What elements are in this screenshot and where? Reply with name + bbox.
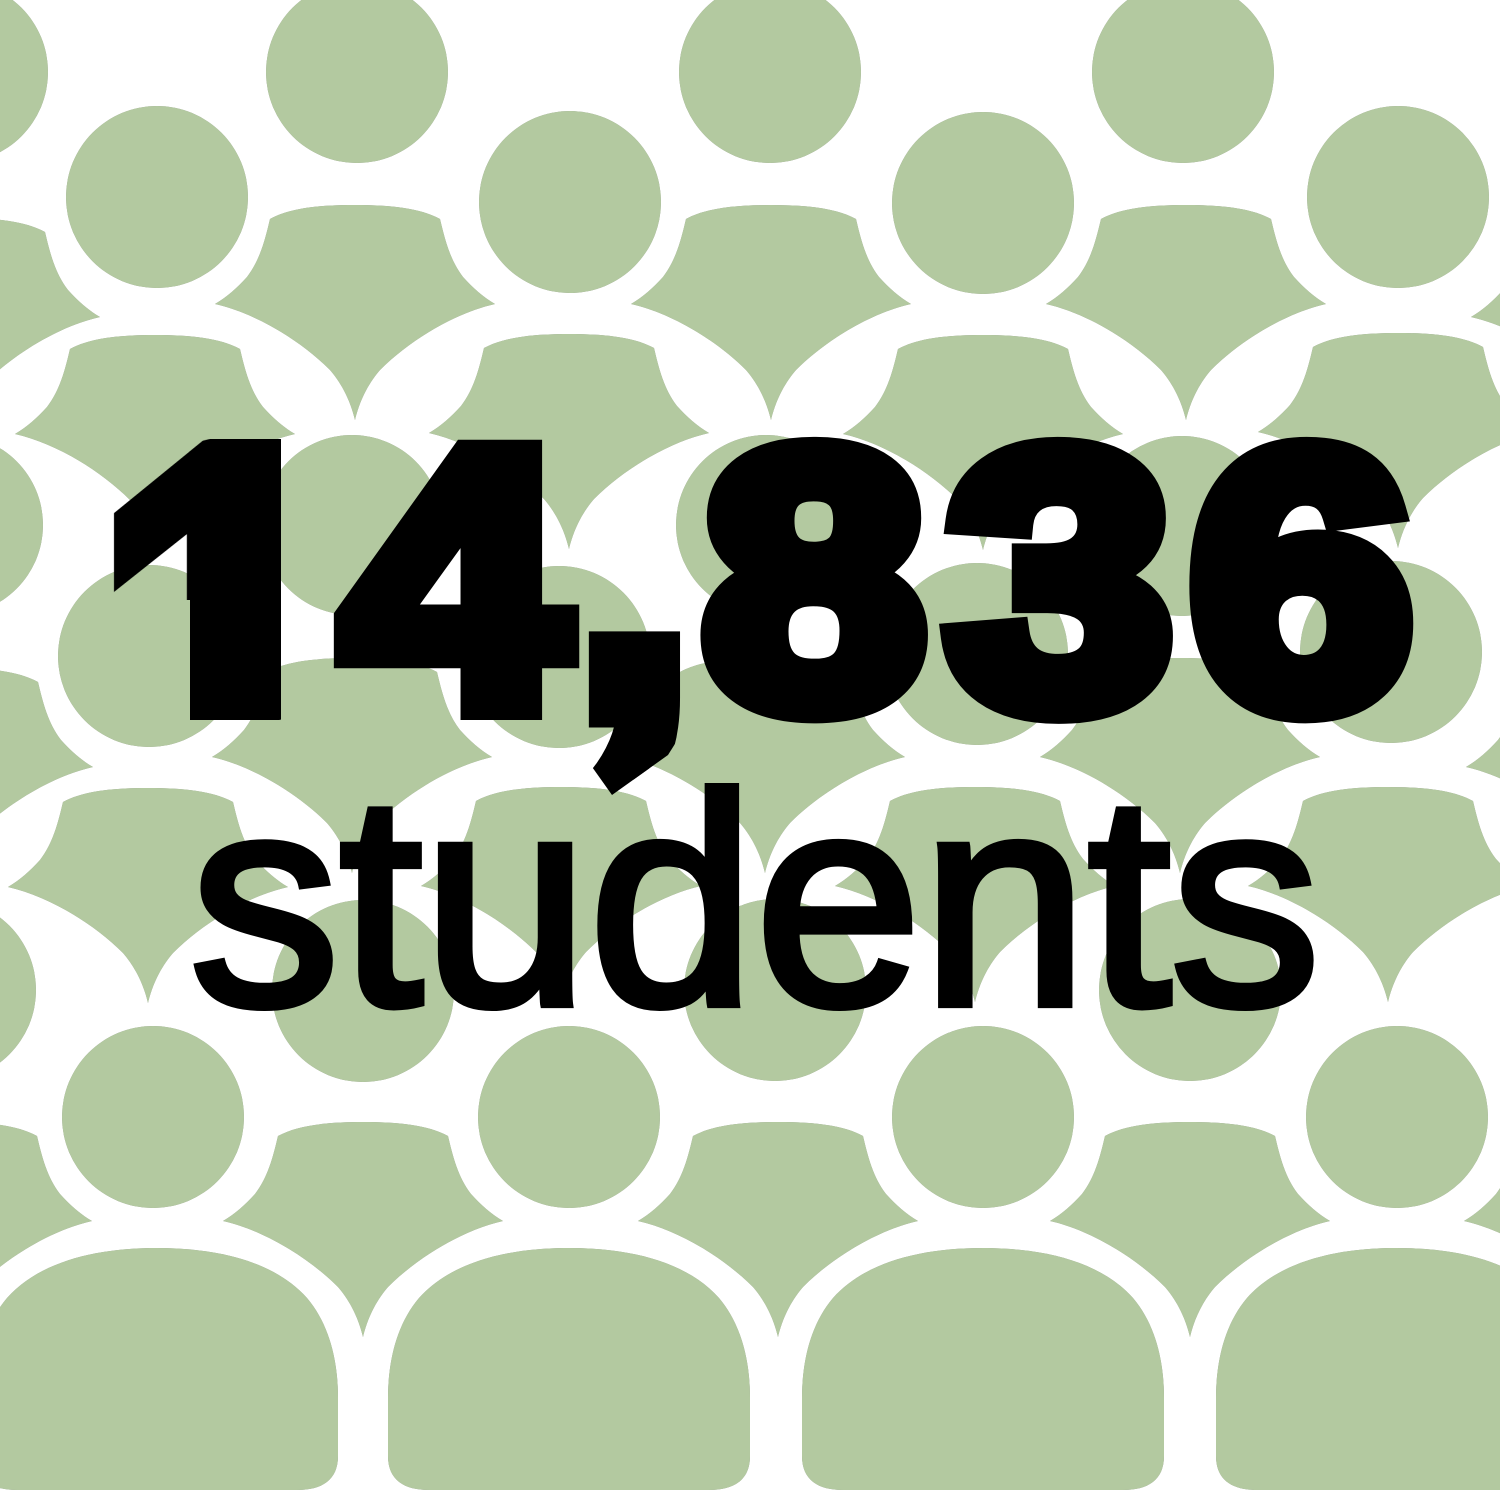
crowd row 4 (8, 561, 1500, 1003)
headline number: 3 (948, 378, 1171, 783)
crowd row 1 (back) (0, 0, 1500, 433)
headline number: 8 (704, 377, 924, 782)
crowd row 6 (front) (0, 1026, 1500, 1490)
label: students: students (190, 734, 1320, 1068)
crowd row 2 (15, 106, 1500, 550)
headline number (102, 317, 1411, 831)
headline number: 6 (1191, 376, 1411, 782)
crowd row 3 (0, 435, 1500, 883)
crowd row 5 (0, 899, 1500, 1337)
headline number: 4 (342, 373, 570, 786)
headline number: , (574, 317, 694, 806)
headline number: 1 (102, 337, 347, 831)
